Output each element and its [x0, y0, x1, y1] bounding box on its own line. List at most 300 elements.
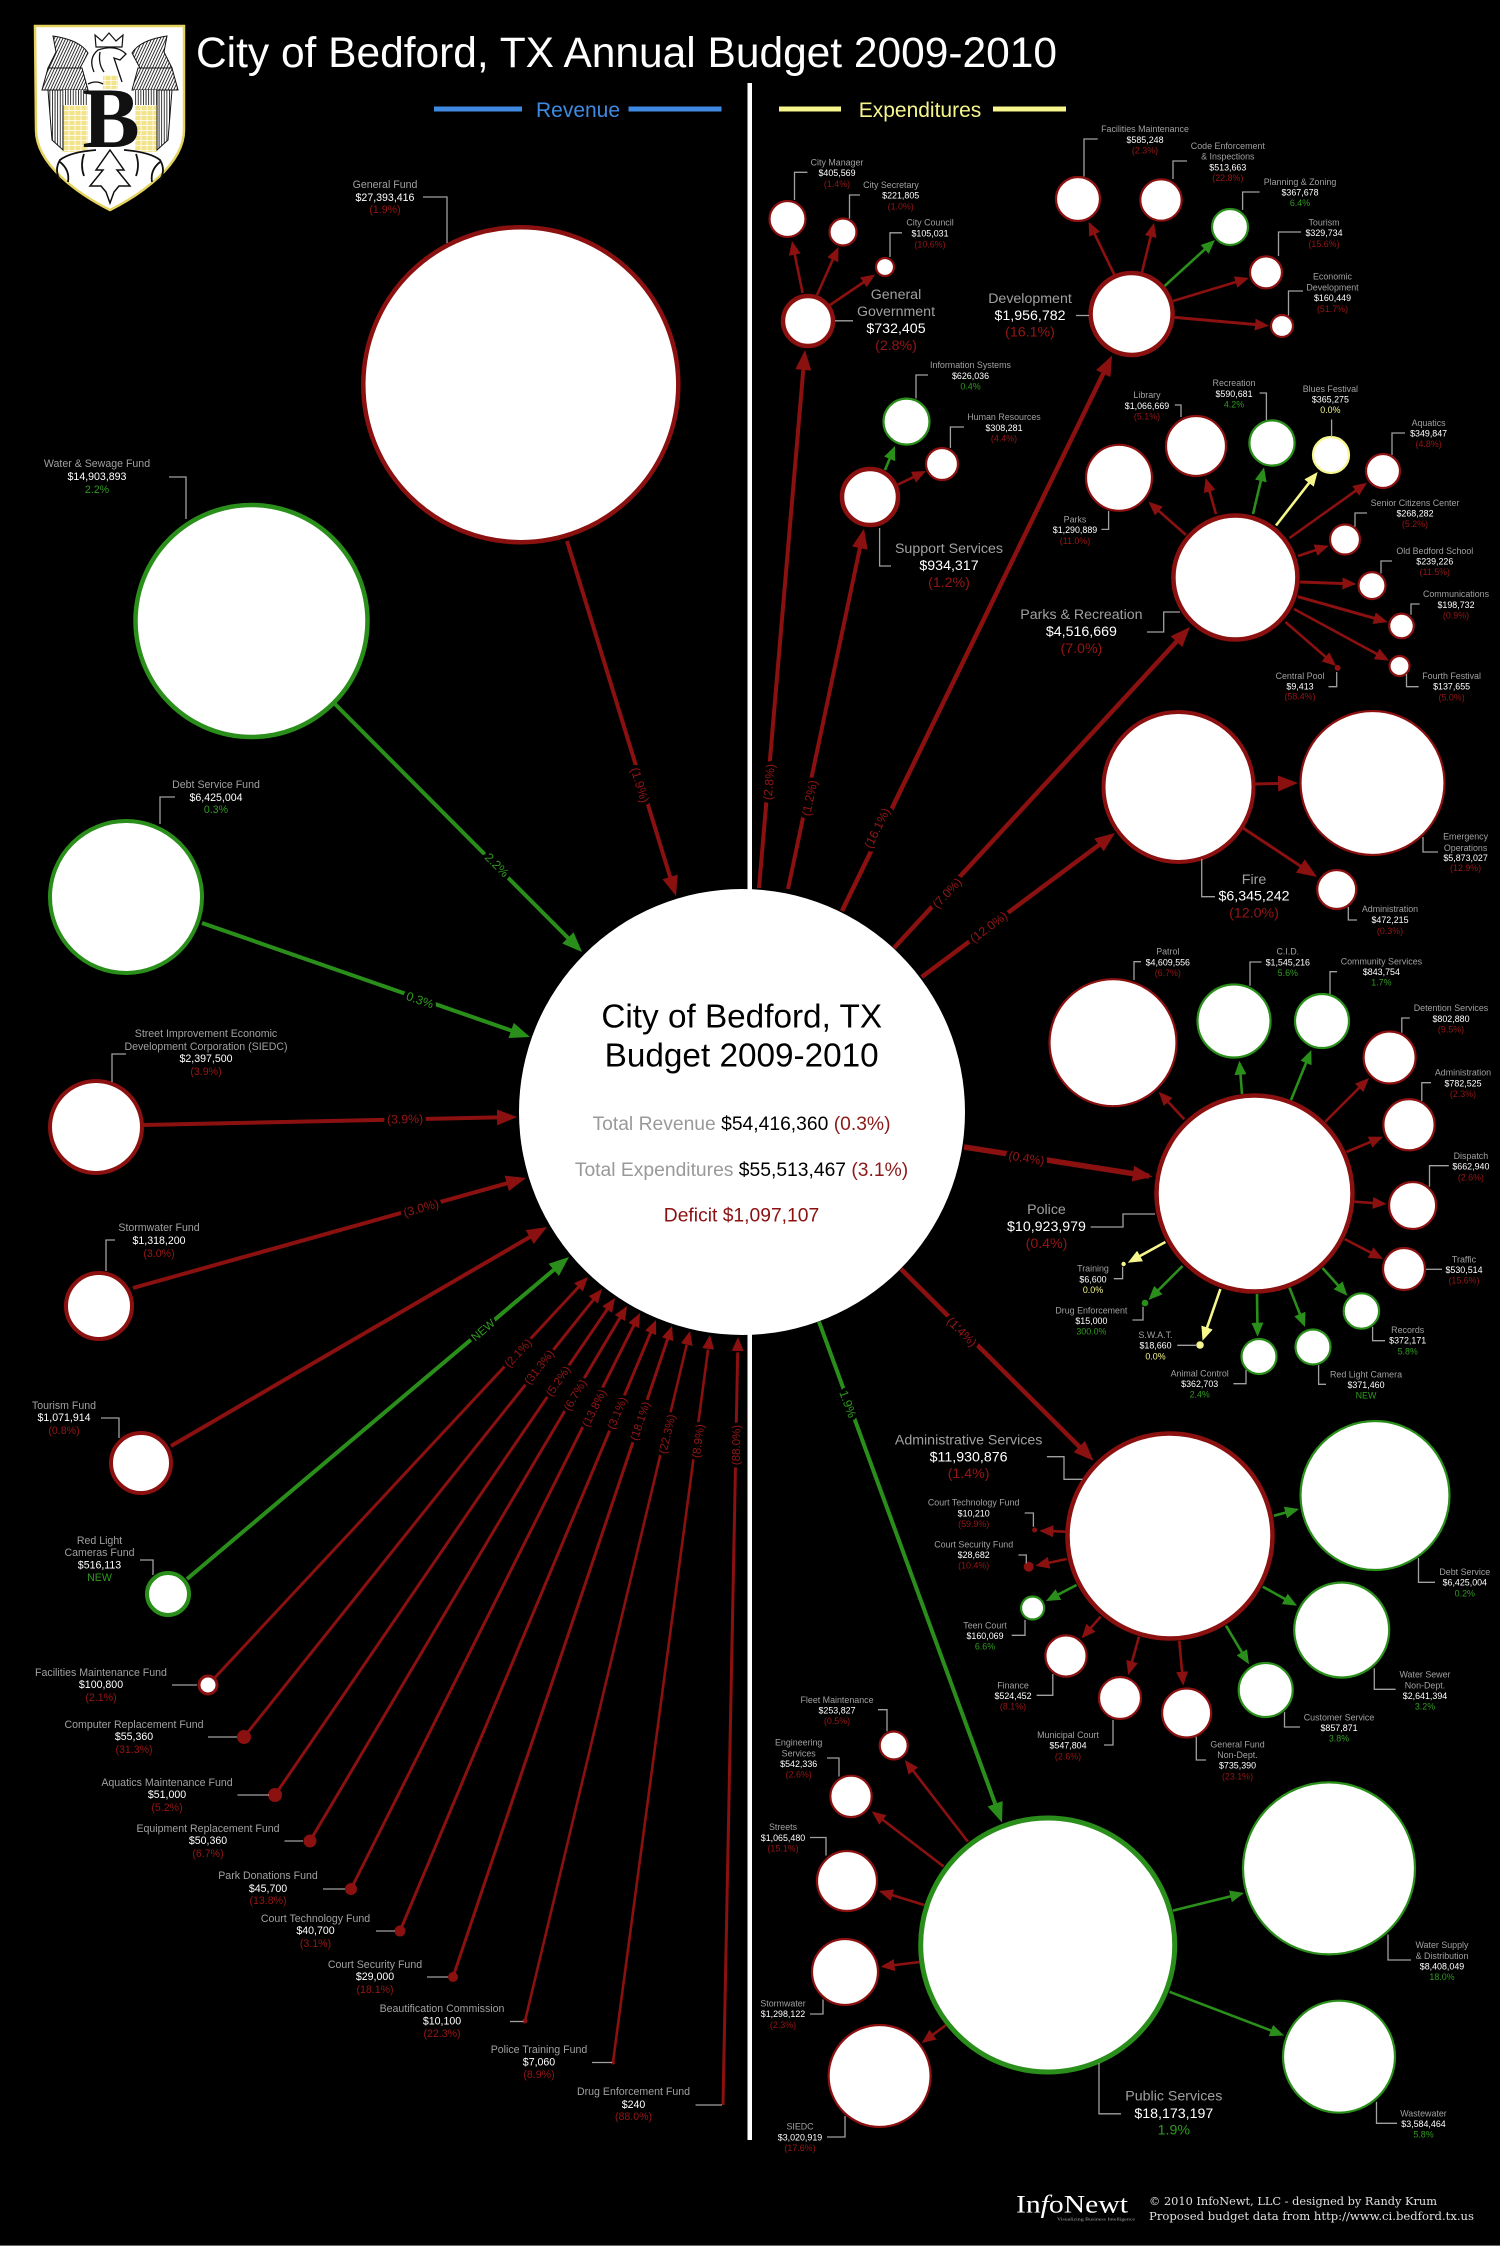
- bubble: Fire: [1104, 712, 1254, 862]
- label: Training: [1077, 1264, 1123, 1295]
- text: total expenditures: Total Expenditures $55,513,467 (3.1%): [575, 1160, 908, 1181]
- label: Tourism Fund: $1,071,914: [37, 1412, 91, 1424]
- panel: central budget circle: [519, 889, 965, 1335]
- label: Computer Replacement Fund: [65, 1719, 237, 1756]
- label: Park Donations Fund: Park Donations Fund: [218, 1870, 318, 1882]
- label: Fleet Maintenance: $253,827: [818, 1705, 856, 1715]
- label: Fire Administration: [1348, 904, 1418, 936]
- label: Tourism: Tourism: [1308, 217, 1340, 227]
- label: Animal Control: Animal Control: [1171, 1368, 1229, 1378]
- dot: Court Security Fund: [1024, 1562, 1034, 1572]
- label: Police Administration: (2.3%): [1450, 1089, 1476, 1099]
- label: Aquatics: $349,847: [1410, 429, 1447, 439]
- label: Streets: $1,065,480: [761, 1833, 805, 1843]
- label: Tourism: $329,734: [1305, 228, 1343, 238]
- label: Economic Development: Economic: [1313, 271, 1353, 281]
- label: Customer Service: 3.8%: [1329, 1734, 1349, 1744]
- label: C.I.D.: C.I.D.: [1276, 947, 1299, 957]
- label: Municipal Court: $547,804: [1049, 1741, 1087, 1751]
- label: Administrative Services: (1.4%): [948, 1466, 989, 1482]
- label: Stormwater Fund: $1,318,200: [132, 1235, 186, 1247]
- label: Customer Service: Customer Service: [1304, 1712, 1374, 1722]
- label: Teen Court: [963, 1620, 1025, 1652]
- label: General Fund: (1.9%): [369, 204, 401, 216]
- label: General Fund: [353, 179, 447, 243]
- bubble: Recreation: [1249, 420, 1295, 466]
- label: Parks: Parks: [1064, 514, 1087, 524]
- label: Wastewater: Wastewater: [1400, 2108, 1447, 2118]
- bubble: Public Services: [921, 1818, 1175, 2072]
- label: Police: Police: [1027, 1202, 1066, 1218]
- arrow: Beautification Commission: [525, 1331, 690, 2021]
- label: Animal Control: [1171, 1368, 1246, 1400]
- arrows: General Government children: [792, 241, 875, 305]
- label: Court Technology Fund: [928, 1498, 1033, 1529]
- label: Water Supply & Distribution: 18.0%: [1429, 1972, 1455, 1982]
- arrow: budget to Police: (0.4%): [1007, 1149, 1045, 1168]
- label: Water Sewer Non-Dept.: [1374, 1668, 1451, 1712]
- label: S.W.A.T.: [1138, 1330, 1197, 1361]
- label: Animal Control: 2.4%: [1190, 1390, 1210, 1400]
- text: total revenue: Total Revenue $54,416,360 (0.3%): [592, 1114, 891, 1135]
- bubble: Development: [1091, 273, 1173, 355]
- label: C.I.D.: [1250, 947, 1310, 986]
- arrow: SIEDC fund: [143, 1112, 517, 1127]
- label: Teen Court: Teen Court: [963, 1620, 1007, 1630]
- label: Court Technology Fund: Court Technology Fund: [928, 1498, 1020, 1508]
- label: City Manager: (1.4%): [824, 179, 850, 189]
- icon: City of Bedford shield logo: B: [82, 70, 140, 166]
- label: Parks: $1,290,889: [1053, 525, 1097, 535]
- label: Engineering Services: (2.6%): [786, 1770, 812, 1780]
- arrow: Drug Enforcement Fund: (88.0%): [731, 1425, 743, 1465]
- label: Information Systems: Information Systems: [930, 360, 1012, 370]
- dot: Police Training Fund: [611, 2060, 615, 2064]
- label: Tourism Fund: [32, 1400, 119, 1438]
- label: Fire: Fire: [1242, 872, 1266, 888]
- label: Engineering Services: Engineering: [775, 1738, 822, 1748]
- label: Records: $372,171: [1389, 1336, 1426, 1346]
- label: Water Supply & Distribution: [1388, 1934, 1469, 1982]
- label: Court Security Fund: Court Security Fund: [328, 1959, 422, 1971]
- label: Records: Records: [1391, 1325, 1425, 1335]
- label: Police Training Fund: Police Training Fund: [491, 2044, 587, 2056]
- label: Facilities Maintenance Fund: Facilities Maintenance Fund: [35, 1667, 167, 1679]
- label: Development: [988, 291, 1089, 341]
- bubble: C.I.D.: [1198, 984, 1270, 1058]
- label: Economic Development: $160,449: [1314, 293, 1351, 303]
- arrow: Court Technology Fund: (3.1%): [606, 1395, 630, 1431]
- label: Detention Services: $802,880: [1432, 1014, 1470, 1024]
- label: Wastewater: [1376, 2102, 1447, 2140]
- bottom rule: [0, 2245, 1500, 2246]
- label: Traffic: (15.6%): [1448, 1276, 1480, 1286]
- label: Blues Festival: $365,275: [1312, 395, 1349, 405]
- label: Equipment Replacement Fund: [136, 1823, 303, 1860]
- bubble: Records: [1344, 1293, 1379, 1329]
- label: Drug Enforcement: $15,000: [1075, 1316, 1107, 1326]
- label: Streets: (15.1%): [767, 1844, 799, 1854]
- panel: Parks & Recreation: [894, 378, 1490, 948]
- label: Parks & Recreation: $4,516,669: [1046, 624, 1117, 640]
- label: Drug Enforcement Fund: (88.0%): [615, 2111, 652, 2123]
- label: Dispatch: (2.6%): [1458, 1172, 1484, 1182]
- label: City Secretary: City Secretary: [863, 180, 919, 190]
- label: Court Technology Fund: Court Technology Fund: [261, 1913, 370, 1925]
- label: General Fund Non-Dept.: Non-Dept.: [1217, 1750, 1258, 1760]
- arrow: Water & Sewage Fund: [334, 703, 582, 952]
- arrow: Equipment Replacement Fund: (6.7%): [562, 1378, 590, 1413]
- label: Animal Control: $362,703: [1181, 1379, 1218, 1389]
- label: Court Security Fund: [328, 1959, 448, 1996]
- label: Red Light Cameras Fund: Red Light: [77, 1535, 122, 1547]
- label: Training: 0.0%: [1083, 1285, 1103, 1295]
- bubble: Dispatch: [1389, 1182, 1436, 1229]
- label: Debt Service: 0.2%: [1455, 1588, 1475, 1598]
- arrow: Red Light Cameras Fund: NEW: [470, 1317, 498, 1344]
- label: Emergency Operations: Emergency: [1443, 832, 1489, 842]
- label: Drug Enforcement Fund: $240: [622, 2099, 645, 2111]
- bubble: Tourism Fund: [111, 1433, 171, 1493]
- label: Information Systems: 0.4%: [960, 382, 981, 392]
- bubble: Debt Service Fund: [50, 821, 202, 973]
- dot: Computer Replacement Fund: [237, 1730, 251, 1744]
- dot: Court Technology Fund: [1032, 1528, 1037, 1532]
- label: S.W.A.T.: S.W.A.T.: [1138, 1330, 1173, 1340]
- dot: Aquatics Maintenance Fund: [268, 1788, 282, 1802]
- heading: central title: [601, 999, 882, 1075]
- label: Court Technology Fund: $40,700: [296, 1925, 335, 1937]
- label: Old Bedford School: Old Bedford School: [1396, 546, 1473, 556]
- label: Senior Citizens Center: (5.2%): [1402, 519, 1428, 529]
- label: Equipment Replacement Fund: $50,360: [189, 1835, 227, 1847]
- arrow: Debt Service Fund: [202, 923, 530, 1037]
- bubble: Water Supply & Distribution: [1243, 1782, 1415, 1954]
- bubble: Animal Control: [1242, 1339, 1276, 1374]
- label: Fire Administration: $472,215: [1371, 915, 1409, 925]
- label: Customer Service: [1284, 1712, 1374, 1744]
- label: Aquatics Maintenance Fund: Aquatics Maintenance Fund: [101, 1777, 233, 1789]
- label: Fleet Maintenance: [800, 1695, 887, 1731]
- bubble: Parks & Recreation: [1173, 516, 1297, 640]
- arrow: Drug Enforcement Fund: [723, 1337, 743, 2105]
- label: Fire Administration: Administration: [1362, 904, 1418, 914]
- bubble: Customer Service: [1239, 1663, 1293, 1717]
- label: SIEDC: (17.6%): [784, 2143, 816, 2153]
- label: Traffic: Traffic: [1452, 1254, 1477, 1264]
- dot: S.W.A.T.: [1196, 1341, 1204, 1349]
- label: SIEDC fund: Street Improvement Economic: [135, 1028, 278, 1040]
- label: Human Resources: Human Resources: [967, 412, 1041, 422]
- label: Fleet Maintenance: Fleet Maintenance: [800, 1695, 874, 1705]
- label: Blues Festival: Blues Festival: [1303, 384, 1358, 394]
- label: City Council: [890, 217, 954, 257]
- bubble: Wastewater: [1283, 2001, 1395, 2113]
- label: Planning & Zoning: $367,678: [1281, 188, 1319, 198]
- label: Streets: Streets: [769, 1822, 798, 1832]
- label: Water Sewer Non-Dept.: $2,641,394: [1403, 1691, 1447, 1701]
- label: Debt Service Fund: 0.3%: [204, 804, 229, 816]
- label: Stormwater: $1,298,122: [761, 2009, 805, 2019]
- arrow: budget to Fire: [922, 833, 1115, 977]
- bubble: Facilities Maintenance: [1056, 177, 1100, 221]
- label: Detention Services: [1402, 1003, 1489, 1035]
- label: Human Resources: (4.4%): [991, 434, 1017, 444]
- label: Dispatch: Dispatch: [1454, 1151, 1488, 1161]
- label: Police: [1007, 1202, 1155, 1252]
- label: Support Services: (1.2%): [928, 575, 970, 591]
- label: Central Pool: Central Pool: [1276, 671, 1324, 681]
- label: Finance: Finance: [997, 1680, 1029, 1690]
- label: SIEDC: [778, 2116, 845, 2153]
- label: General Government: $732,405: [866, 321, 926, 337]
- arrow: budget to Parks & Recreation: (7.0%): [930, 875, 965, 911]
- arrow: Court Security Fund: (18.1%): [629, 1400, 653, 1442]
- label: Drug Enforcement: 300.0%: [1076, 1327, 1107, 1337]
- label: Code Enforcement: Code Enforcement: [1191, 141, 1265, 151]
- label: Water Sewer Non-Dept.: Water Sewer: [1400, 1670, 1451, 1680]
- label: City Council: City Council: [906, 217, 954, 227]
- label: City Secretary: (1.0%): [888, 201, 914, 211]
- bubble: Water & Sewage Fund: [136, 505, 368, 737]
- bubble: Human Resources: [926, 448, 958, 480]
- arrow: budget to Development: [842, 356, 1112, 911]
- label: Fire: [1202, 859, 1290, 922]
- label: Aquatics Maintenance Fund: [101, 1777, 269, 1814]
- label: Debt Service Fund: [160, 779, 260, 824]
- label: Red Light Cameras Fund: NEW: [87, 1572, 112, 1584]
- heading: Expenditures: Expenditures: [859, 99, 981, 122]
- arrow: Park Donations Fund: [351, 1313, 640, 1889]
- label: Communications: Communications: [1423, 589, 1490, 599]
- arrow: budget to General Government: (2.8%): [761, 763, 778, 801]
- label: Aquatics Maintenance Fund: $51,000: [148, 1789, 186, 1801]
- label: Stormwater Fund: [106, 1222, 200, 1271]
- label: Blues Festival: 0.0%: [1320, 405, 1341, 415]
- label: Economic Development: Development: [1306, 282, 1359, 292]
- arrow: budget to Development: (16.1%): [862, 806, 893, 851]
- label: Drug Enforcement: Drug Enforcement: [1055, 1305, 1128, 1315]
- label: Public Services: $18,173,197: [1134, 2106, 1213, 2122]
- bubble: Municipal Court: [1099, 1677, 1141, 1719]
- dot: Court Technology Fund: [394, 1926, 406, 1936]
- panel: Support Services: [788, 360, 1041, 889]
- label: Parks: [1053, 511, 1109, 546]
- label: City Manager: $405,569: [818, 168, 856, 178]
- bubble: General Fund Non-Dept.: [1162, 1688, 1211, 1738]
- label: Police Administration: $782,525: [1444, 1078, 1482, 1088]
- label: Community Services: [1330, 956, 1423, 994]
- bubble: Traffic: [1383, 1248, 1425, 1290]
- arrow: Police Training Fund: [613, 1335, 710, 2062]
- bubble: Engineering Services: [830, 1776, 872, 1817]
- label: Support Services: Support Services: [895, 541, 1003, 557]
- dot: Central Pool: [1335, 665, 1341, 671]
- label: Drug Enforcement: [1055, 1305, 1143, 1337]
- label: Patrol: $4,609,556: [1146, 957, 1190, 967]
- label: Municipal Court: Municipal Court: [1037, 1730, 1099, 1740]
- label: Water Sewer Non-Dept.: 3.2%: [1415, 1702, 1435, 1712]
- label: Records: [1373, 1325, 1426, 1356]
- label: General Fund Non-Dept.: General Fund: [1210, 1739, 1265, 1749]
- label: Administrative Services: Administrative Services: [895, 1433, 1042, 1449]
- arrows: Administrative Services children: [1035, 1509, 1299, 1686]
- label: Planning & Zoning: Planning & Zoning: [1264, 177, 1336, 187]
- central divider: [748, 83, 752, 2140]
- label: Development: Development: [988, 291, 1072, 307]
- text: footer credits: Proposed budget data from http://www.ci.bedford.tx.us: [1149, 2209, 1474, 2223]
- arrow: budget to Public Services: 1.9%: [836, 1389, 859, 1420]
- heading: Expenditures: [779, 99, 1066, 122]
- label: Public Services: Public Services: [1125, 2088, 1222, 2104]
- label: Wastewater: $3,584,464: [1401, 2119, 1446, 2129]
- label: Engineering Services: Services: [782, 1748, 816, 1758]
- dot: Equipment Replacement Fund: [304, 1834, 316, 1848]
- panel: Fire: [922, 711, 1489, 977]
- bubble: Communications: [1389, 614, 1414, 638]
- label: Court Security Fund: $28,682: [958, 1550, 990, 1560]
- arrow: budget to Administrative Services: (1.4%): [944, 1314, 980, 1350]
- label: Court Security Fund: (18.1%): [356, 1984, 394, 1996]
- label: Equipment Replacement Fund: (6.7%): [192, 1848, 224, 1860]
- arrow: Beautification Commission: (22.3%): [657, 1413, 679, 1455]
- arrow: Computer Replacement Fund: [244, 1289, 602, 1737]
- label: Red Light Camera: [1319, 1365, 1402, 1401]
- label: Debt Service: Debt Service: [1439, 1567, 1490, 1577]
- bubble: Library: [1166, 416, 1226, 476]
- label: Support Services: [880, 528, 1003, 591]
- label: Old Bedford School: [1381, 546, 1473, 577]
- label: SIEDC fund: (3.9%): [190, 1066, 222, 1078]
- label: SIEDC fund: $2,397,500: [179, 1053, 233, 1065]
- label: SIEDC fund: [112, 1028, 288, 1082]
- bubble: Red Light Cameras Fund: [147, 1573, 189, 1615]
- label: Court Technology Fund: (59.9%): [958, 1519, 989, 1529]
- label: Information Systems: $626,036: [952, 371, 989, 381]
- arrow: Tourism Fund: [171, 1227, 547, 1446]
- label: Blues Festival: [1303, 384, 1358, 437]
- label: Tourism: (15.6%): [1308, 239, 1340, 249]
- label: Development: (16.1%): [1005, 325, 1055, 341]
- arrow: Facilities Maintenance Fund: (2.1%): [503, 1337, 535, 1370]
- label: Facilities Maintenance: [1084, 124, 1189, 176]
- label: Fire Administration: (0.3%): [1377, 926, 1403, 936]
- label: Community Services: $843,754: [1363, 967, 1400, 977]
- heading: central title: Budget 2009-2010: [605, 1038, 879, 1075]
- label: Communications: [1411, 589, 1490, 620]
- label: Water Supply & Distribution: Water Supply: [1416, 1940, 1469, 1950]
- label: Finance: $524,452: [994, 1691, 1032, 1701]
- heading: Revenue: [434, 99, 722, 122]
- label: Fleet Maintenance: (0.5%): [824, 1716, 850, 1726]
- label: Aquatics: (4.8%): [1416, 439, 1442, 449]
- bubble: Fire Administration: [1317, 870, 1356, 909]
- bubble: Streets: [817, 1851, 877, 1911]
- label: Patrol: Patrol: [1156, 947, 1179, 957]
- label: Finance: [994, 1674, 1053, 1712]
- arrow: Park Donations Fund: (13.8%): [581, 1388, 609, 1429]
- bubble: Economic Development: [1271, 315, 1293, 337]
- panel: revenue funds: [32, 179, 743, 2123]
- arrow: budget to Administrative Services: [901, 1269, 1094, 1461]
- bubble: Police Administration: [1383, 1099, 1435, 1150]
- label: General Government: (2.8%): [875, 338, 917, 354]
- arrow: budget to Support Services: [788, 529, 864, 889]
- panel: Public Services: [760, 1322, 1469, 2153]
- label: Police Training Fund: [491, 2044, 612, 2081]
- label: Drug Enforcement Fund: Drug Enforcement Fund: [577, 2086, 690, 2098]
- panel: Police: [964, 947, 1491, 1401]
- label: Beautification Commission: [380, 2003, 524, 2040]
- arrow: Court Technology Fund: [400, 1320, 656, 1931]
- arrow: General Fund: (1.9%): [628, 766, 652, 804]
- label: General Government: [835, 287, 935, 354]
- label: Court Security Fund: $29,000: [356, 1971, 394, 1983]
- label: City Council: (10.6%): [914, 239, 946, 249]
- label: Dispatch: $662,940: [1452, 1162, 1489, 1172]
- label: Detention Services: (9.5%): [1438, 1025, 1464, 1035]
- label: Finance: (8.1%): [1000, 1702, 1026, 1712]
- label: Dispatch: [1430, 1151, 1489, 1187]
- label: City Secretary: [850, 180, 919, 219]
- arrow: budget to Support Services: (1.2%): [799, 779, 820, 817]
- label: Water & Sewage Fund: Water & Sewage Fund: [44, 458, 150, 470]
- label: Tourism Fund: (0.8%): [48, 1425, 80, 1437]
- arrow: Debt Service Fund: 0.3%: [404, 989, 435, 1011]
- label: Parks: (11.0%): [1060, 536, 1090, 546]
- label: S.W.A.T.: $18,660: [1139, 1341, 1172, 1351]
- label: Central Pool: (58.4%): [1284, 692, 1316, 702]
- arrow: budget to Police: [964, 1147, 1153, 1177]
- label: SIEDC fund: Development Corporation (SIEDC): [124, 1041, 288, 1053]
- label: Red Light Cameras Fund: Cameras Fund: [64, 1547, 135, 1559]
- label: C.I.D.: 5.6%: [1278, 968, 1298, 978]
- label: Traffic: $530,514: [1445, 1265, 1483, 1275]
- heading: central title: City of Bedford, TX: [601, 999, 882, 1036]
- arrow: budget to Parks & Recreation: [894, 627, 1190, 948]
- label: Court Technology Fund: $10,210: [958, 1508, 990, 1518]
- label: Computer Replacement Fund: Computer Replacement Fund: [65, 1719, 204, 1731]
- label: Development: $1,956,782: [994, 308, 1066, 324]
- bubble: City Council: [876, 258, 894, 276]
- label: General Fund Non-Dept.: [1196, 1737, 1265, 1781]
- label: Park Donations Fund: $45,700: [249, 1883, 287, 1895]
- label: Park Donations Fund: (13.8%): [249, 1895, 287, 1907]
- bubble: General Government: [783, 296, 833, 346]
- text: footer credits: [1149, 2194, 1474, 2223]
- label: Police: $10,923,979: [1007, 1219, 1086, 1235]
- bubble: Support Services: [842, 469, 898, 525]
- label: Fourth Festival: [1406, 671, 1481, 702]
- dot: Park Donations Fund: [345, 1883, 357, 1895]
- label: Old Bedford School: (11.5%): [1420, 567, 1450, 577]
- bubble: Patrol: [1050, 979, 1176, 1106]
- label: Public Services: [1099, 2063, 1222, 2138]
- label: Fire: (12.0%): [1229, 906, 1279, 922]
- label: Parks & Recreation: (7.0%): [1061, 641, 1102, 657]
- label: Computer Replacement Fund: $55,360: [115, 1731, 153, 1743]
- label: Engineering Services: $542,336: [780, 1759, 817, 1769]
- label: Emergency Operations: Operations: [1444, 843, 1488, 853]
- label: Court Security Fund: [934, 1539, 1026, 1571]
- label: Red Light Cameras Fund: $516,113: [78, 1560, 121, 1572]
- bubble: Community Services: [1295, 994, 1349, 1048]
- label: Municipal Court: [1037, 1720, 1113, 1761]
- label: Water & Sewage Fund: [44, 458, 186, 519]
- label: Library: Library: [1133, 390, 1161, 400]
- label: Planning & Zoning: [1243, 177, 1336, 210]
- label: SIEDC: $3,020,919: [778, 2132, 822, 2142]
